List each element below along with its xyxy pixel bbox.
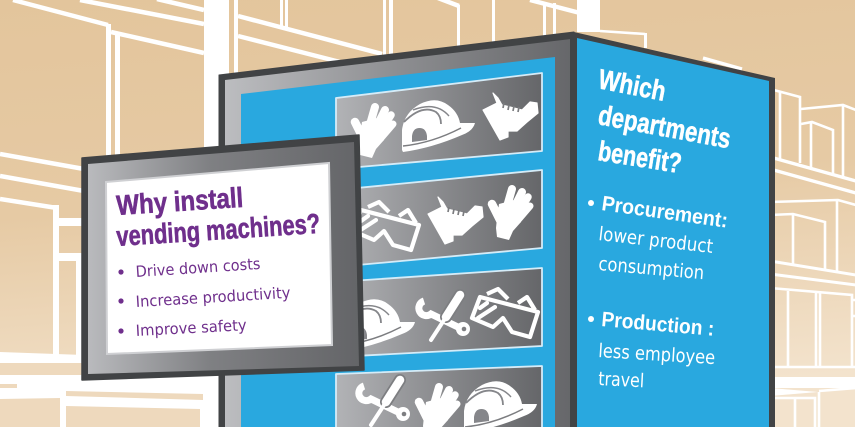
production item: less employee: [598, 340, 716, 369]
machine front frame: [225, 39, 571, 427]
vending machine: [219, 32, 775, 427]
sign heading: Why install: [115, 182, 244, 221]
shelf row 4: tools, glove, helmet: [336, 366, 542, 427]
side heading: Which: [596, 63, 669, 107]
sign bullet list: Drive down costs: [135, 255, 261, 281]
shelf row 1: glove, helmet, boot: [336, 73, 542, 169]
shelf row 2: goggles, boot, glove: [336, 170, 542, 267]
procurement item: Procurement:: [600, 192, 729, 233]
side heading: benefit?: [596, 135, 684, 179]
side heading: departments: [596, 99, 733, 154]
procurement item: lower product: [597, 223, 714, 258]
side heading: [596, 63, 733, 179]
procurement item: [588, 192, 729, 284]
machine side blue panel: [577, 38, 769, 427]
machine side panel casing: [570, 32, 775, 427]
sign heading: [115, 182, 321, 252]
machine front blue panel: [241, 57, 555, 427]
sign bullet list: [118, 255, 291, 340]
sign bullet list: Increase productivity: [135, 284, 291, 311]
sign frame: [88, 142, 359, 374]
sign casing: [82, 135, 364, 380]
side panel text: which departments benefit: [588, 63, 733, 392]
sign bullet list: Improve safety: [135, 316, 247, 340]
procurement item: consumption: [598, 253, 705, 284]
production item: travel: [598, 368, 645, 392]
shelf row 3: helmet, tools, goggles: [336, 268, 542, 357]
sign: why install vending machines: [82, 135, 364, 380]
sign white panel: [106, 163, 332, 354]
production item: [588, 308, 716, 392]
machine front casing: [219, 32, 574, 427]
sign heading: vending machines?: [115, 208, 321, 252]
production item: Production :: [601, 308, 715, 341]
